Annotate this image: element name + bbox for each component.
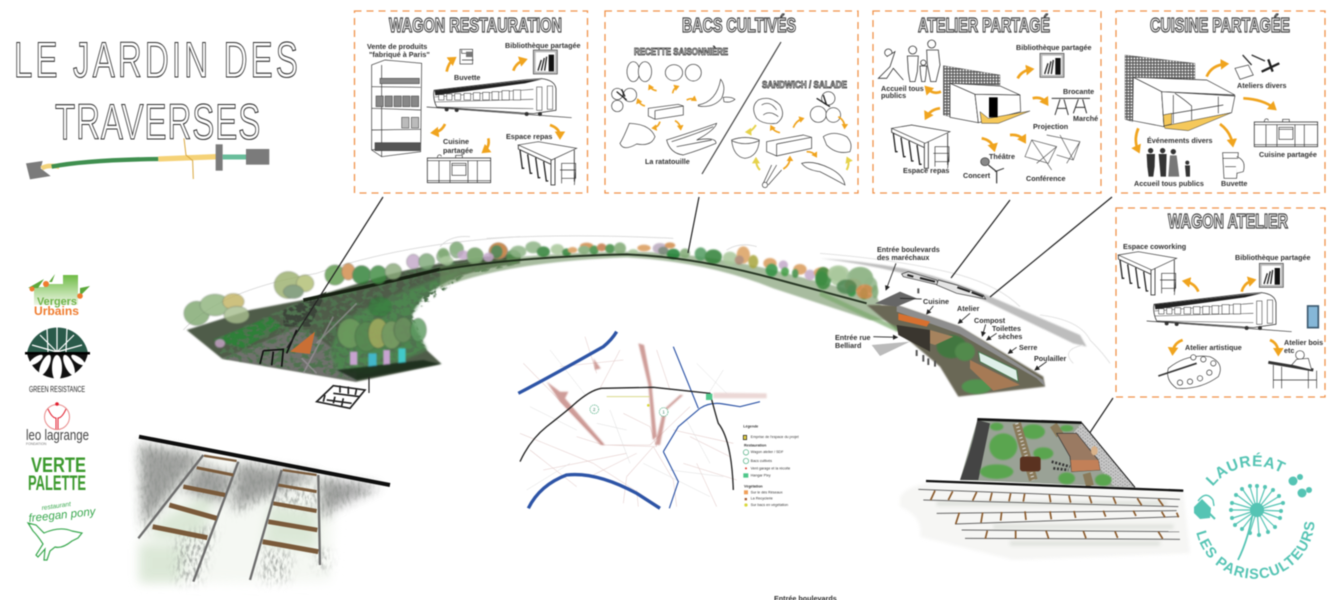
icon: left vegetables xyxy=(612,62,735,155)
rails xyxy=(138,455,320,582)
icon: bookshelf xyxy=(533,50,557,74)
icon: bookshelf xyxy=(1259,263,1283,287)
logo: vergers urbains xyxy=(28,274,90,318)
legend: La Recyclerie xyxy=(751,497,773,501)
icon: berries xyxy=(1288,474,1312,498)
drawings xyxy=(1125,55,1318,178)
labels: Vente de produits xyxy=(367,42,427,51)
thin roads xyxy=(520,337,737,507)
title line 1: LE JARDIN DES xyxy=(14,32,298,88)
labels: Espace repas xyxy=(903,166,949,175)
icon: workbench xyxy=(1268,351,1317,388)
aerial labels: sèches xyxy=(998,332,1022,341)
icon: shelves with jars xyxy=(372,60,422,157)
drawings xyxy=(878,40,1090,183)
circle markers: 2 xyxy=(593,407,596,412)
greenhouse xyxy=(978,352,1018,382)
labels: Brocante xyxy=(1063,87,1094,96)
icon: kitchen building xyxy=(1125,55,1235,131)
icon: dining table xyxy=(518,142,577,185)
labels: Cuisine xyxy=(443,137,469,146)
building roof xyxy=(898,313,930,327)
left wall xyxy=(960,420,990,480)
icon: kitchen xyxy=(1254,119,1318,147)
scattered furniture xyxy=(1052,462,1070,470)
labels: Buvette xyxy=(454,73,480,82)
central track xyxy=(440,254,867,303)
labels: Ateliers divers xyxy=(1237,81,1287,90)
logo: leo lagrange: leo lagrange xyxy=(26,427,89,444)
labels: Espace coworking xyxy=(1123,242,1186,251)
labels: publics xyxy=(881,91,906,100)
aerial labels: Atelier xyxy=(957,304,980,313)
icon: paint palette xyxy=(1158,355,1220,388)
icon: blue door xyxy=(1308,306,1318,328)
labels: Bibliothèque partagée xyxy=(1016,43,1091,52)
aerial labels: Serre xyxy=(1019,343,1037,352)
icon: small track sketch xyxy=(317,386,365,408)
site ground xyxy=(867,305,1045,397)
heading: WAGON RESTAURATION xyxy=(389,15,562,37)
labels: Théâtre xyxy=(989,152,1015,161)
aerial labels: Compost xyxy=(974,316,1006,325)
green lawn xyxy=(330,270,463,373)
panel: wagon atelier xyxy=(1116,208,1325,397)
map of Paris xyxy=(518,332,799,508)
icon: right vegetables xyxy=(732,92,851,188)
leader arrows xyxy=(873,263,1047,370)
badge text bottom: LES PARISCULTEURS xyxy=(1196,521,1315,580)
badge: lauréat les parisculteurs xyxy=(1156,452,1315,580)
panel: wagon restauration xyxy=(354,11,588,193)
aerial labels: Poulailler xyxy=(1034,354,1067,363)
rail ties xyxy=(302,303,357,373)
panel: bacs cultivés xyxy=(605,11,858,193)
right wall xyxy=(1073,423,1135,487)
drawings xyxy=(1118,252,1318,388)
bottom-left rail perspective xyxy=(138,437,390,583)
trees xyxy=(438,241,877,299)
ground wash xyxy=(138,442,337,583)
icon: microphone xyxy=(981,158,1004,183)
panel: atelier partagé xyxy=(873,11,1101,193)
brown kiosk xyxy=(1020,457,1041,471)
garden tracks xyxy=(1017,423,1090,486)
legend: Sur le dés Réseaux xyxy=(751,490,783,494)
aerial labels: Belliard xyxy=(835,341,861,350)
subheading: recette: RECETTE SAISONNIÈRE xyxy=(634,45,728,58)
labels: Atelier bois xyxy=(1284,338,1323,347)
sleepers xyxy=(931,491,1179,539)
icon: workshop building xyxy=(943,66,1030,123)
sketch halo xyxy=(440,236,757,250)
sketch halo xyxy=(820,253,1110,363)
title xyxy=(14,32,298,150)
logo: leo lagrange xyxy=(26,402,89,446)
icon: spade and rail logo xyxy=(26,138,269,179)
black edge wall xyxy=(139,437,390,485)
aerial labels: Entrée boulevards xyxy=(877,245,940,254)
logo: verte palette: PALETTE xyxy=(28,472,86,495)
icon: trestle market table xyxy=(1052,98,1090,115)
logo: verte palette: VERTE xyxy=(31,454,86,477)
label: La ratatouille xyxy=(645,157,690,166)
icon: bookshelf xyxy=(1040,53,1064,77)
panel border xyxy=(354,11,588,193)
sleepers xyxy=(153,456,318,552)
sketch halo xyxy=(183,237,520,330)
icon: people xyxy=(1147,148,1190,177)
rail corridors xyxy=(547,343,767,445)
divider line xyxy=(702,42,781,174)
aerial view: left garden end xyxy=(183,237,521,408)
drawings xyxy=(372,49,577,185)
panel border xyxy=(605,11,858,193)
labels: partagée xyxy=(443,146,473,155)
legend xyxy=(743,424,799,507)
icon: train wagon xyxy=(427,79,572,118)
vegetables xyxy=(612,62,851,188)
labels: Cuisine partagée xyxy=(1259,150,1317,159)
icon: tools xyxy=(1235,55,1279,79)
foliage texture xyxy=(213,255,520,380)
logo: green resistance: GREEN RESISTANCE xyxy=(29,385,85,394)
icon: watering can xyxy=(1194,495,1215,519)
legend: Sur bacs en végétation xyxy=(751,503,788,507)
labels: etc xyxy=(1284,346,1294,355)
wagon xyxy=(1057,433,1100,472)
icon: people xyxy=(878,40,940,82)
bicycles xyxy=(917,288,935,367)
logo: verte palette xyxy=(28,454,86,495)
arrows xyxy=(1136,64,1274,151)
arrows xyxy=(433,59,560,151)
grass strip xyxy=(820,293,898,330)
legend: Bacs cultivés xyxy=(751,459,772,463)
labels: "fabriqué à Paris" xyxy=(369,50,430,59)
legend: Hangar Pixy xyxy=(751,474,771,478)
labels: Buvette xyxy=(1221,179,1247,188)
trees xyxy=(184,242,521,352)
icon: folding chairs xyxy=(1025,135,1080,170)
logos column xyxy=(25,274,97,560)
paths and gravel xyxy=(222,327,357,382)
grey wall xyxy=(897,305,1045,387)
vegetation xyxy=(980,423,1112,486)
flowers and shadows xyxy=(337,348,440,380)
labels: Accueil tous xyxy=(881,84,924,93)
building deck xyxy=(930,330,953,345)
labels: Bibliothèque partagée xyxy=(1235,253,1310,262)
heading: WAGON ATELIER xyxy=(1168,211,1288,233)
arrows xyxy=(638,86,849,170)
ballast ground xyxy=(900,483,1190,560)
logo: leo lagrange: FONDATION xyxy=(26,442,47,446)
wagon front xyxy=(1071,460,1100,472)
grainy hatching xyxy=(140,445,380,582)
heading: ATELIER PARTAGÉ xyxy=(918,14,1050,37)
panel: cuisine partagée xyxy=(1116,11,1325,193)
soft shading xyxy=(140,445,380,525)
panel border xyxy=(1116,11,1325,193)
railway xyxy=(820,258,1087,347)
icon: coworking table xyxy=(1118,252,1177,295)
legend: Légende xyxy=(743,424,758,428)
pit floor xyxy=(960,420,1135,487)
subheading: sandwich: SANDWICH / SALADE xyxy=(762,79,847,91)
labels: Espace repas xyxy=(506,132,552,141)
labels: Événements divers xyxy=(1147,136,1213,145)
labels: Concert xyxy=(963,171,991,180)
building front xyxy=(897,325,930,352)
project marker xyxy=(706,394,712,400)
labels: Accueil tous publics xyxy=(1134,179,1204,188)
yellow path xyxy=(607,395,650,398)
badge text top: LAURÉAT xyxy=(1205,452,1287,486)
wooden deck xyxy=(970,360,1020,391)
logo: freegan pony: freegan pony xyxy=(28,506,97,525)
aerial view: central arc xyxy=(438,236,888,320)
aerial labels: des maréchaux xyxy=(877,253,929,262)
aerial view: right buildings xyxy=(815,253,1110,397)
legend: Emprise de l'espace du projet xyxy=(751,435,799,439)
green beds xyxy=(213,317,282,348)
labels: Marché xyxy=(1073,114,1098,123)
icon: drink dispenser xyxy=(1223,153,1244,178)
bottom-right site section xyxy=(900,419,1190,560)
panel border xyxy=(873,11,1101,193)
panel border xyxy=(1116,208,1325,397)
petite ceinture line xyxy=(520,387,733,490)
aerial labels: Toilettes xyxy=(992,324,1021,333)
orange platform xyxy=(290,332,315,354)
icon: train xyxy=(902,272,986,299)
arrows xyxy=(1173,280,1278,353)
aerial labels: Entrée rue xyxy=(835,333,871,342)
rivers xyxy=(518,332,760,508)
icon: dandelion xyxy=(1230,485,1284,560)
labels: Bibliothèque partagée xyxy=(505,41,580,50)
tracks entry xyxy=(875,292,917,307)
dark slope xyxy=(283,292,327,327)
logo: freegan pony: restaurant xyxy=(41,501,72,512)
icon: left planter xyxy=(648,104,683,119)
crosswalk xyxy=(872,342,910,356)
yellow dot xyxy=(647,404,650,407)
small object xyxy=(1091,446,1098,455)
black wall tops xyxy=(926,419,1183,491)
logo: vergers urbains: Vergers xyxy=(37,296,77,308)
tree group xyxy=(815,265,992,394)
heading: BACS CULTIVÉS xyxy=(682,14,796,37)
ballast specks xyxy=(937,503,1173,543)
ground band xyxy=(440,252,888,320)
spine track xyxy=(303,258,520,300)
logo: freegan pony xyxy=(28,501,97,560)
icon: train wagon xyxy=(1147,293,1292,332)
ground xyxy=(187,253,520,382)
title line 2: TRAVERSES xyxy=(55,94,260,150)
circle markers: 1 xyxy=(662,410,665,415)
legend: Vent garage et la récolte xyxy=(751,466,790,470)
legend: Végétation xyxy=(744,485,763,489)
labels: Projection xyxy=(1033,122,1068,131)
labels: Conférence xyxy=(1026,174,1066,183)
arrows xyxy=(926,69,1047,149)
icon: dining table xyxy=(892,125,950,168)
logo: vergers urbains: Urbains xyxy=(34,306,79,318)
icon: drinks xyxy=(460,49,473,64)
wagon shelter xyxy=(260,330,297,367)
icon: right planter xyxy=(767,135,812,156)
legend: Wagon atelier / SDF xyxy=(751,450,784,454)
aerial labels: Cuisine xyxy=(923,297,949,306)
rails xyxy=(918,489,1180,539)
pale green between rails xyxy=(140,492,317,582)
labels: Atelier artistique xyxy=(1185,343,1242,352)
icon: kitchen xyxy=(427,155,491,183)
callout lines xyxy=(287,197,1113,455)
legend: Restauration xyxy=(744,443,766,447)
logo: green resistance xyxy=(25,326,90,394)
circle markers xyxy=(590,405,668,416)
